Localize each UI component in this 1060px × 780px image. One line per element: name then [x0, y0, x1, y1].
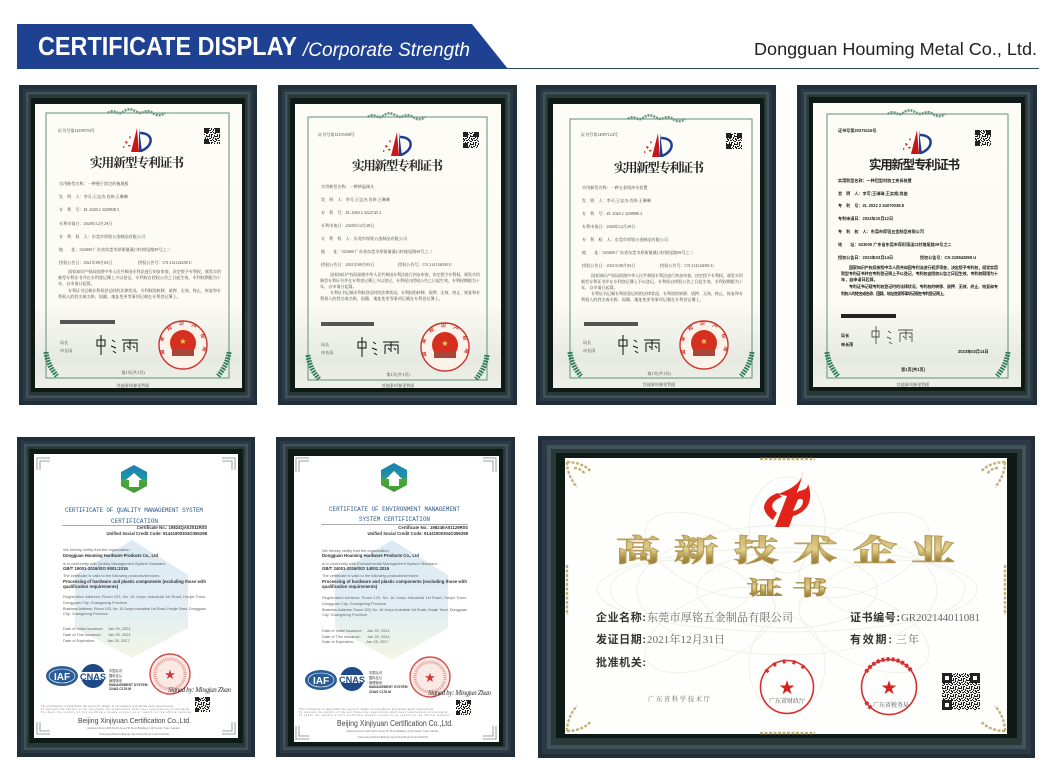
validity field: 有效期: — [850, 632, 892, 646]
patent details: 发 明 人：李可;王忠杰;肖炜;王琳琳 — [321, 196, 391, 202]
gold title: 企 — [853, 534, 897, 568]
iaf badge: IAF — [54, 672, 70, 683]
fine print: To maintain the validity of the certificate the organization shall meet requirements of standards — [299, 711, 448, 714]
watermark — [75, 540, 188, 658]
certificate body: is in conformity with Environmental Management System Standard: — [322, 561, 438, 566]
statement paragraphs: 国家知识产权局依照中华人民共和国专利法进行初步审查，决定授予专利权，颁发实用 — [849, 264, 998, 270]
accreditation text: 国际互认 — [109, 673, 123, 678]
dates: Jan 29, 2024 — [108, 632, 131, 637]
signature — [358, 337, 399, 357]
patent details: 地 址：523000 广东省东莞市厚街镇溪口村坡尾路39号之二 — [321, 248, 433, 254]
watermark — [335, 540, 448, 660]
top ornament — [628, 115, 685, 121]
patent details: 专利申请日：2020年12月29日 — [59, 220, 112, 226]
statement paragraphs: 利权人的姓名或名称、国籍、地址变更等事项记载在专利登记簿上。 — [58, 293, 181, 299]
frame — [278, 85, 517, 405]
certification body address — [87, 726, 181, 736]
certificate body: City, Guangdong Province — [322, 612, 367, 617]
patent details — [582, 184, 714, 268]
panel: environment management certificate — [276, 437, 515, 757]
finance seal: 广东省财政厅 — [769, 697, 805, 705]
certificate number: 证书号第20375116号 — [838, 127, 876, 133]
header — [17, 24, 1039, 69]
patent details: 授权公告日：2023年03月14日 — [838, 254, 893, 260]
signature — [619, 335, 660, 355]
certificate body: Business Address: Room 103, No. 16 Junpu Industrial 1st Road, Houjie Town, Dongguan — [63, 606, 206, 611]
certificate body: The certificate is valid to the following products/services: — [63, 573, 160, 578]
patent details: 地 址：523000 广东省东莞市厚街镇溪口村坡尾路39号之二 — [59, 246, 171, 252]
red seal: ★ — [441, 339, 449, 348]
subtitle: /Corporate Strength — [301, 40, 470, 61]
certificate numbers: Certificate No.: 19824QA02011R0S — [137, 525, 207, 530]
gold subtitle: 证 — [747, 578, 783, 600]
guilloche background — [597, 477, 977, 713]
dates — [63, 626, 131, 643]
certification body address: Chaoyang District,Beijing City,China (Post Code:100102) — [358, 735, 428, 739]
certificate body: Processing of hardware and plastic components (excluding those with — [63, 579, 206, 584]
statement paragraphs: 专利证书记载专利权登记时的法律状况。专利权的转移、质押、无效、终止、恢复和专 — [68, 287, 221, 293]
certificate number field — [850, 610, 980, 624]
footer note: 其他事项参见背面 — [117, 382, 149, 388]
statement paragraphs — [320, 271, 480, 301]
certificate numbers — [367, 525, 469, 536]
certificate title: CERTIFICATE OF ENVIRONMENT MANAGEMENT — [329, 506, 460, 513]
certificate title — [329, 506, 460, 523]
gold title — [616, 534, 955, 568]
qr code — [975, 130, 991, 146]
issue date field — [596, 632, 725, 646]
patent details: 专利申请日：2022年10月12日 — [838, 215, 893, 221]
grant date: 2023年03月14日 — [958, 348, 988, 354]
statement paragraphs: 新型专利证书并在专利登记簿上予以登记。专利权自授权公告之日起生效。专利权期限为十 — [581, 278, 743, 284]
patent details: 授权公告日：2021年09月03日 — [582, 262, 635, 268]
dates: Jan 28, 2027 — [366, 639, 388, 644]
cnas badge — [338, 667, 366, 691]
certificate title: 实用新型专利证书 — [869, 157, 960, 172]
cnas badge: CNAS — [80, 672, 106, 682]
certification body name: Beijing Xinjiyuan Certification Co.,Ltd. — [78, 716, 191, 725]
certificate body — [63, 547, 206, 616]
patent details — [838, 177, 976, 260]
red seal: 国家知识产权局 — [422, 324, 470, 357]
statement paragraphs: 专利证书记载专利权登记时的法律状况。专利权的转移、质押、无效、终止、恢复和专 — [330, 289, 480, 295]
statement paragraphs: 新型专利证书并在专利登记簿上予以登记。专利权自授权公告之日起生效。专利权期限为十 — [58, 274, 221, 280]
patent details: 实用新型名称：一种便于固定的拖地板 — [59, 180, 129, 186]
certificate body: qualification requirements) — [322, 584, 378, 589]
panel: patent certificate 4 — [797, 85, 1037, 405]
page number: 第1页(共1页) — [647, 370, 671, 376]
fine print: The certification is valid within the period of validity of surveillance and annual audit requirements — [299, 708, 434, 711]
paper — [553, 104, 760, 388]
accreditation text: 中国认可 — [369, 670, 383, 675]
signature — [872, 326, 913, 344]
header rule — [500, 68, 1039, 69]
approving authority label: 批准机关: — [596, 655, 646, 669]
tax seal — [862, 659, 916, 714]
red seal: 国家知识产权局 — [160, 322, 208, 355]
certificate title: 实用新型专利证书 — [352, 158, 443, 173]
panel: patent certificate 3 — [536, 85, 776, 405]
top ornament — [368, 113, 425, 119]
barcode — [321, 322, 374, 326]
tax seal: 广东省税务局 — [873, 701, 909, 709]
corner florals — [570, 352, 752, 376]
signature: Signed by: Mingjun Zhan — [168, 686, 232, 694]
accreditation text: CNAS C179-M — [369, 690, 391, 694]
signatory — [841, 332, 853, 347]
logo — [381, 463, 407, 492]
dates — [322, 628, 390, 644]
dates: Date of This Issuance: — [322, 634, 361, 639]
corner florals — [46, 352, 229, 376]
panel: patent certificate 2 — [278, 85, 517, 405]
gold title: 高 — [616, 534, 660, 568]
cnas badge: CNAS — [339, 675, 365, 685]
gold title: 技 — [734, 534, 778, 568]
top ornament — [888, 110, 945, 116]
qr code — [204, 128, 220, 144]
title rule — [62, 524, 207, 527]
dates: Date of Expiration: — [322, 639, 354, 644]
company name: Dongguan Houming Metal Co., Ltd. — [754, 39, 1037, 59]
certificate number: 证书号第14097124号 — [581, 131, 618, 137]
statement paragraphs: 年，自申请日起算。 — [58, 280, 95, 286]
certification body name: Beijing Xinjiyuan Certification Co.,Ltd. — [337, 719, 453, 728]
patent details: 授权公告日：2021年09月03日 — [59, 259, 112, 265]
patent details: 专 利 号：ZL 2020 2 3258938.5 — [59, 206, 119, 212]
patent details — [321, 183, 452, 267]
fine print: To check the validity of this certificate please contact us or search on the official website — [41, 711, 192, 714]
barcode — [841, 314, 896, 318]
red seal: ★ — [700, 337, 708, 346]
certificate title: CERTIFICATE OF QUALITY MANAGEMENT SYSTEM — [65, 507, 203, 514]
fine print — [299, 708, 450, 717]
patent details: 专利申请日：2020年12月29日 — [582, 223, 635, 229]
cnipa logo — [123, 128, 151, 152]
cnipa logo — [644, 133, 672, 157]
page number: 第1页(共1页) — [121, 369, 145, 375]
panel: patent certificate 1 — [19, 85, 257, 405]
issue date field: 发证日期: — [596, 632, 646, 646]
statement paragraphs — [581, 272, 743, 302]
certification body address: Address:Room 603,North Area,7th Floor,Building 3,Qi Family Yuan Garden, — [87, 726, 181, 730]
frame — [276, 437, 515, 757]
page number: 第1页(共1页) — [901, 366, 925, 372]
fine print: To maintain the validity of the certificate the organization shall meet requirements of standards — [41, 708, 190, 711]
statement paragraphs: 国家知识产权局依照中华人民共和国专利法进行初步审查，决定授予专利权，颁发实用 — [330, 271, 480, 277]
finance seal — [760, 660, 814, 714]
statement paragraphs: 新型专利证书并在专利登记簿上予以登记。专利权自授权公告之日起生效。专利权期限为十 — [841, 270, 998, 276]
gold subtitle — [747, 578, 829, 600]
certification body address: Address:Room 603,North Area,7th Floor,Building 3,Qi Family Yuan Garden, — [346, 729, 440, 733]
frame — [17, 437, 255, 757]
patent details: 专 利 号：ZL 2020 2 3258980.2 — [582, 210, 642, 216]
accreditation text: 中国认可 — [109, 668, 123, 673]
dates: Jan 29, 2024 — [367, 634, 390, 639]
cnipa logo — [903, 130, 931, 154]
certificate body: We hereby certify that the organization: — [63, 547, 131, 552]
dates: Date of Initial Issuance: — [322, 628, 362, 633]
certification body address — [346, 729, 440, 739]
patent details: 实用新型名称：一种铝型材加工夹具装置 — [838, 177, 912, 183]
certificate number: 证书号第14109703号 — [58, 127, 95, 133]
certification body address: Chaoyang District,Beijing City,China (Post Code:100102) — [99, 732, 169, 736]
footer note: 其他事项参见背面 — [897, 381, 929, 387]
patent details: 发 明 人：李可;王忠杰;肖炜;王琳琳 — [59, 193, 129, 199]
patent details: 地 址：523000 广东省东莞市厚街镇溪口村坡尾路39号之二 — [838, 241, 952, 247]
certificate title: 实用新型专利证书 — [90, 155, 184, 170]
qr code — [456, 700, 471, 715]
certificate numbers: Unified Social Credit Code: 91441900304O356298 — [106, 531, 208, 536]
certificate body: We hereby certify that the organization: — [322, 548, 390, 553]
certificate body — [322, 548, 467, 617]
finance seal: ★ — [778, 678, 796, 699]
fine print: To check the validity of this certificate please contact us or search on the official website — [299, 714, 450, 717]
title: CERTIFICATE DISPLAY — [38, 33, 297, 61]
qr code — [195, 697, 210, 712]
accreditation text: CNAS C179-M — [109, 687, 131, 691]
accreditation text: 管理体系 — [369, 680, 383, 685]
paper — [294, 456, 499, 742]
panel: quality management certificate — [17, 437, 255, 757]
cnipa logo — [383, 132, 411, 156]
signature: Signed by: Mingjun Zhan — [428, 689, 492, 697]
certificate number: 证书号第14155508号 — [318, 131, 355, 137]
company field — [596, 610, 793, 624]
fine print: The certification is valid within the period of validity of surveillance and annual audit requirements — [41, 705, 174, 708]
certificate body: GB/T 24001-2016/ISO 14001:2015 — [322, 566, 390, 571]
patent details: 专利申请日：2020年12月28日 — [321, 222, 374, 228]
red flame logo — [764, 471, 810, 527]
corner brackets — [296, 458, 496, 739]
certificate number field: GR202144011081 — [901, 612, 980, 624]
patent details: 专 利 权 人：东莞市厚铭五金制品有限公司 — [582, 236, 668, 242]
footer note: 其他事项参见背面 — [643, 381, 675, 387]
statement paragraphs — [58, 268, 221, 299]
dates: Date of Initial Issuance: — [63, 626, 103, 631]
green border — [570, 119, 752, 378]
statement paragraphs: 新型专利证书并在专利登记簿上予以登记。专利权自授权公告之日起生效。专利权期限为十 — [320, 277, 480, 283]
validity field: 三年 — [896, 632, 919, 646]
accreditation text — [369, 670, 408, 694]
signatory: 局长 — [841, 332, 849, 338]
red seal: ★ — [164, 667, 176, 682]
patent details: 专 利 权 人：东莞市厚铭五金制品有限公司 — [59, 233, 145, 239]
patent details: 地 址：523000 广东省东莞市厚街镇溪口村坡尾路39号之二 — [582, 249, 694, 255]
certificate body: is in conformity with Quality Management System Standard: — [63, 561, 166, 566]
paper — [813, 103, 1021, 387]
page number: 第1页(共1页) — [386, 371, 410, 377]
patent details: 授权公告号：CN 214124258 U — [138, 259, 192, 265]
certificate title: CERTIFICATION — [111, 518, 158, 525]
red seal — [150, 654, 190, 694]
qr code — [463, 132, 479, 148]
patent details: 专 利 号：ZL 2020 2 3222745.2 — [321, 209, 381, 215]
footer note: 其他事项参见背面 — [382, 382, 414, 388]
certificate body: qualification requirements) — [63, 584, 119, 589]
qr code — [726, 133, 742, 149]
company field: 企业名称: — [596, 610, 646, 624]
signatory: 申长雨 — [841, 341, 853, 347]
green border — [308, 117, 487, 380]
green border — [46, 113, 229, 378]
corner florals — [827, 352, 1008, 376]
signatory — [583, 339, 595, 353]
patent details — [59, 180, 192, 265]
statement paragraphs: 国家知识产权局依照中华人民共和国专利法进行初步审查，决定授予专利权，颁发实用 — [591, 272, 743, 278]
panel: high-tech enterprise certificate — [538, 436, 1035, 758]
certificate body: Registration Address: Room 103, No. 16 Junpu Industrial 1st Road, Houjie Town, — [322, 595, 467, 600]
signatory: 局长 — [583, 339, 591, 345]
dates: Jan 29, 2024 — [367, 628, 390, 633]
certificate body: Dongguan Houming Hardware Products Co., Ltd — [63, 553, 158, 558]
signatory: 局长 — [321, 341, 329, 347]
iaf badge — [46, 666, 78, 686]
title rule — [321, 523, 468, 526]
patent details: 实用新型名称：一种挤温阀头 — [321, 183, 375, 189]
certificate body: Registration Address: Room 103, No. 16 Junpu Industrial 1st Road, Houjie Town, — [63, 594, 206, 599]
statement paragraphs: 国家知识产权局依照中华人民共和国专利法进行初步审查，决定授予专利权，颁发实用 — [68, 268, 221, 274]
signatory: 申长雨 — [583, 347, 595, 353]
red seal: ★ — [424, 670, 436, 685]
corner brackets — [37, 458, 235, 734]
dates: Jan 29, 2024 — [108, 626, 131, 631]
patent details: 专 利 权 人：东莞市厚铭五金制品有限公司 — [321, 235, 407, 241]
red seal: ★ — [179, 337, 187, 346]
iaf badge — [305, 670, 337, 690]
patent details: 专 利 号：ZL 2022 2 34070039.8 — [838, 202, 905, 208]
signatory: 局长 — [60, 339, 68, 345]
patent details: 发 明 人：李可;王琳琳;王奕艳;尚曲 — [838, 190, 908, 196]
gold title: 术 — [793, 534, 837, 568]
statement paragraphs: 专利证书记载专利权登记时的法律状况。专利权的转移、质押、无效、终止、恢复和专 — [591, 290, 743, 296]
statement paragraphs: 专利证书记载专利权登记时的法律状况。专利权的转移、质押、无效、终止、恢复和专 — [849, 283, 998, 289]
frame — [797, 85, 1037, 405]
certificate numbers: Certificate No.: 19824EA01129R0S — [398, 525, 468, 530]
paper — [35, 104, 242, 388]
patent details: 专 利 权 人：东莞市厚铭五金制品有限公司 — [838, 228, 924, 234]
iaf badge: IAF — [313, 676, 329, 687]
certificate numbers — [106, 525, 208, 536]
gold title: 业 — [911, 534, 955, 568]
certificate title: 实用新型专利证书 — [614, 160, 704, 175]
accreditation text — [109, 668, 148, 691]
corner florals — [308, 355, 487, 379]
signature — [97, 335, 138, 355]
certificate title — [65, 507, 203, 525]
dates: Date of Expiration: — [63, 638, 95, 643]
cnas badge — [78, 664, 108, 688]
certificate body: Business Address: Room 103, No. 16 Junpu Industrial 1st Road, Houjie Town, Dongguan — [322, 607, 467, 612]
top ornament — [108, 109, 165, 115]
certificate body: The certificate is valid to the following products/services: — [322, 573, 419, 578]
signatory — [60, 339, 72, 353]
certificate body: Dongguan City, Guangdong Province — [322, 601, 386, 606]
fine print — [41, 705, 192, 714]
validity field — [850, 632, 919, 646]
green border — [827, 114, 1008, 378]
patent details: 发 明 人：李可;王忠杰;肖炜;王琳琳 — [582, 197, 652, 203]
frame — [538, 436, 1035, 758]
barcode — [584, 322, 638, 326]
statement paragraphs: 年，自申请日起算。 — [320, 283, 357, 289]
patent details: 授权公告日：2021年09月03日 — [321, 261, 374, 267]
accreditation text: MANAGEMENT SYSTEM — [369, 685, 408, 689]
statement paragraphs: 年，自申请日起算。 — [581, 284, 618, 290]
certificate body: Processing of hardware and plastic components (excluding those with — [322, 579, 467, 584]
patent details: 授权公告号：CN 214124065 U — [660, 262, 714, 268]
gold title: 新 — [674, 534, 718, 568]
certificate body: GB/T 19001-2016/ISO 9001:2015 — [63, 566, 128, 571]
frame — [536, 85, 776, 405]
corner ornaments — [567, 459, 1005, 733]
certificate body: City, Guangdong Province — [63, 611, 108, 616]
certificate title: SYSTEM CERTIFICATION — [359, 516, 430, 523]
statement paragraphs: 利权人的姓名或名称、国籍、地址变更等事项记载在专利登记簿上。 — [320, 295, 443, 301]
authority name: 广东省科学技术厅 — [648, 694, 711, 703]
barcode — [60, 320, 115, 324]
statement paragraphs: 利权人的姓名或名称、国籍、地址变更等事项记载在专利登记簿上。 — [841, 290, 947, 296]
red seal — [410, 657, 450, 697]
certificate body: Dongguan City, Guangdong Province — [63, 600, 127, 605]
signatory: 申长雨 — [60, 347, 72, 353]
qr code — [942, 673, 980, 710]
certificate numbers: Unified Social Credit Code: 91441900304O356298 — [367, 531, 469, 536]
gold subtitle: 书 — [792, 578, 829, 600]
dates: Jan 28, 2027 — [107, 638, 130, 643]
patent details: 授权公告号：CN 218842859 U — [920, 254, 976, 260]
logo — [121, 465, 147, 493]
signatory: 申长雨 — [321, 349, 333, 355]
frame — [19, 85, 257, 405]
dates: Date of This Issuance: — [63, 632, 102, 637]
patent details: 授权公告号：CN 214124030 U — [398, 261, 452, 267]
company field: 东莞市厚铭五金制品有限公司 — [647, 610, 793, 624]
certificate body: Dongguan Houming Hardware Products Co., Ltd — [322, 553, 419, 558]
paper — [295, 104, 501, 388]
statement paragraphs: 年，自申请日起算。 — [841, 276, 878, 282]
signatory — [321, 341, 333, 355]
statement paragraphs — [841, 264, 998, 296]
statement paragraphs: 利权人的姓名或名称、国籍、地址变更等事项记载在专利登记簿上。 — [581, 296, 704, 302]
issue date field: 2021年12月31日 — [647, 632, 725, 646]
certificate number field: 证书编号: — [850, 610, 900, 624]
header banner — [17, 24, 508, 69]
paper — [34, 454, 238, 738]
tax seal: ★ — [880, 678, 898, 699]
accreditation text: 管理体系 — [109, 678, 123, 683]
paper — [565, 458, 1007, 734]
accreditation text: MANAGEMENT SYSTEM — [109, 683, 148, 687]
red seal: 国家知识产权局 — [681, 322, 728, 355]
patent details: 实用新型名称：一种五金线冲头装置 — [582, 184, 648, 190]
accreditation text: 国际互认 — [369, 675, 383, 680]
